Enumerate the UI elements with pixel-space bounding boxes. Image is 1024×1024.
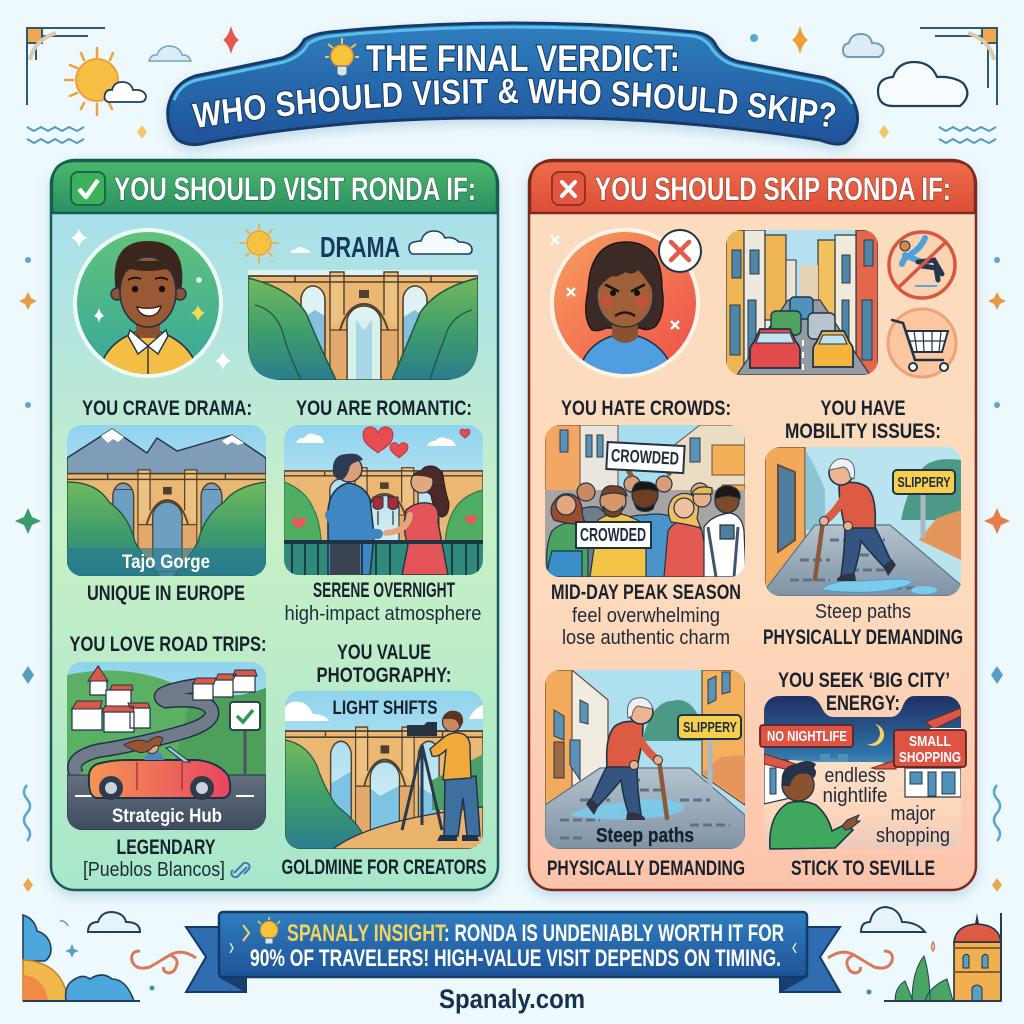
icon: no slipping (889, 232, 955, 298)
portrait: happy traveler (75, 230, 221, 378)
side squiggles (24, 785, 1000, 841)
icon: cloud top-right (843, 34, 884, 57)
caption: goldmine: GOLDMINE FOR CREATORS (282, 856, 486, 879)
bottom-right tower (884, 913, 1001, 1001)
label: drama: DRAMA (320, 232, 400, 264)
heading: big city (778, 669, 950, 715)
icon: red sparkle (223, 26, 239, 54)
moon (867, 724, 884, 746)
caption: serene overnight (284, 579, 482, 625)
icon: insight bulb (230, 917, 796, 953)
side sparkles (15, 257, 1010, 892)
sign check (230, 702, 260, 774)
scene: photographer (285, 691, 483, 849)
caption: mid-day peak season (551, 581, 741, 649)
insight line 2: 90% OF TRAVELERS! HIGH-VALUE VISIT DEPENDS ON TIMING. (250, 945, 781, 972)
sign crowded bottom (576, 522, 651, 548)
caption: physically demanding: PHYSICALLY DEMANDING (547, 857, 745, 880)
swirl left (132, 951, 196, 973)
sign crowded top (606, 442, 685, 473)
caption: legendary pueblos blancos (83, 836, 250, 881)
heading: photography (316, 641, 452, 687)
small diamonds and waves (27, 125, 996, 143)
person from behind (770, 761, 860, 849)
label: LIGHT SHIFTS (332, 698, 438, 719)
heading: mobility: YOU HAVE (820, 397, 906, 420)
sign slippery (893, 470, 955, 494)
heading: mobility (785, 397, 941, 443)
caption: unique in Europe: UNIQUE IN EUROPE (87, 582, 245, 605)
car (89, 760, 230, 798)
heading: you crave drama: YOU CRAVE DRAMA: (82, 397, 252, 420)
sign crowded top: CROWDED (611, 445, 679, 469)
caption: Tajo Gorge (122, 552, 210, 573)
sign slippery (678, 715, 741, 739)
text: major shopping (876, 803, 950, 847)
scene: road trip (67, 662, 266, 830)
caption: mid-day peak season: lose authentic charm (562, 627, 730, 649)
scene: drama bridge (240, 224, 478, 380)
icon: large cloud top-right (878, 62, 967, 106)
sign slippery: SLIPPERY (898, 474, 950, 491)
sign no nightlife: NO NIGHTLIFE (767, 728, 847, 745)
x mark (562, 182, 575, 196)
scene: Tajo Gorge (67, 425, 266, 576)
header text: YOU SHOULD VISIT RONDA IF: (114, 171, 476, 207)
village right (193, 676, 255, 700)
scene: steep paths (545, 670, 745, 849)
insight line 1: SPANALY INSIGHT (287, 920, 446, 947)
icon: shopping cart (888, 309, 956, 377)
bottom-left landscape (23, 915, 140, 1001)
corner ornament top-right (920, 28, 997, 105)
heading: mobility: MOBILITY ISSUES: (785, 420, 941, 443)
heading: big city: YOU SEEK ‘BIG CITY’ (778, 669, 950, 692)
caption: legendary pueblos blancos: [Pueblos Blancos] (83, 859, 225, 881)
small bottom-left marks (60, 921, 872, 994)
site url: Spanaly.com (439, 984, 585, 1014)
village left (90, 667, 107, 695)
hearts (363, 427, 470, 458)
panel: skip (529, 160, 976, 890)
icon: light bulb (325, 38, 359, 76)
corner ornament top-left (27, 28, 105, 105)
footer banner: insight (186, 912, 840, 992)
caption: Strategic Hub (112, 806, 222, 827)
scene: slippery path (765, 447, 961, 596)
scene: romantic couple (284, 425, 484, 575)
scene: big city energy (760, 696, 966, 849)
icon: orange sparkle (792, 26, 808, 54)
icon: sun top-left (65, 48, 146, 115)
scene: traffic street (726, 230, 878, 375)
caption: steep paths demanding: Steep paths (815, 601, 911, 623)
text: major shopping: major (890, 803, 936, 825)
panel: visit (51, 160, 498, 890)
caption: steep paths demanding (763, 601, 963, 649)
title line 1: THE FINAL VERDICT: (366, 38, 680, 79)
bottom-right cloud (861, 907, 925, 932)
text: endless nightlife (822, 765, 888, 807)
sparkles around portrait (71, 229, 231, 370)
icon: small cloud bottom-left (88, 912, 140, 932)
caption: serene overnight: SERENE OVERNIGHT (313, 579, 455, 602)
heading: road trips: YOU LOVE ROAD TRIPS: (70, 633, 266, 656)
header: visit (52, 161, 497, 213)
title line 2: WHO SHOULD VISIT & WHO SHOULD SKIP? (190, 78, 836, 129)
scene: crowds (545, 425, 746, 577)
icon: small cloud top-left (149, 46, 191, 61)
speech bubble x (659, 230, 701, 272)
text: major shopping: shopping (876, 825, 950, 847)
swirl right (828, 951, 892, 973)
icon: dot (750, 34, 758, 42)
heading: big city: ENERGY: (826, 692, 900, 715)
header: skip (530, 161, 975, 213)
sign crowded bottom: CROWDED (580, 525, 646, 545)
caption: stick to seville: STICK TO SEVILLE (791, 857, 935, 880)
sign small shopping: SHOPPING (899, 749, 961, 766)
text: endless nightlife: endless (824, 765, 886, 787)
caption: legendary pueblos blancos: LEGENDARY (116, 836, 216, 859)
caption: mid-day peak season: MID-DAY PEAK SEASON (551, 581, 741, 604)
sign small shopping (894, 730, 966, 767)
heading: hate crowds: YOU HATE CROWDS: (561, 397, 731, 420)
heading: photography: YOU VALUE (337, 641, 431, 664)
caption: serene overnight: high-impact atmosphere (284, 603, 482, 625)
caption: steep paths demanding: PHYSICALLY DEMANDING (763, 626, 963, 649)
insight line 1: : RONDA IS UNDENIABLY WORTH IT FOR (444, 920, 784, 947)
sign no nightlife (760, 725, 853, 747)
heading: you are romantic: YOU ARE ROMANTIC: (296, 397, 472, 420)
heading: photography: PHOTOGRAPHY: (316, 664, 452, 687)
sign small shopping: SMALL (909, 733, 951, 750)
caption: mid-day peak season: feel overwhelming (572, 605, 720, 627)
icon: check box (71, 172, 105, 205)
caption: Steep paths (596, 825, 694, 847)
portrait: unhappy traveler (551, 230, 701, 378)
sign slippery: SLIPPERY (683, 719, 737, 736)
text: endless nightlife: nightlife (822, 785, 888, 807)
title banner (161, 21, 864, 156)
icon: x box (552, 172, 585, 205)
check mark (79, 180, 98, 197)
